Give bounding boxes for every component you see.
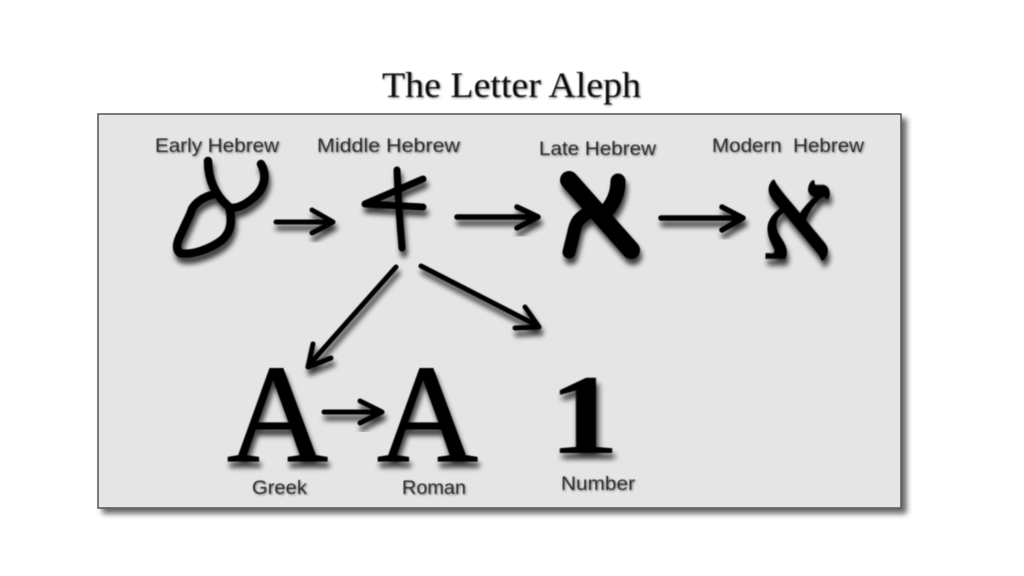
icon: late Hebrew aleph [569, 180, 631, 252]
arrow: middle Hebrew to number [421, 266, 539, 328]
label: Number: Number [561, 474, 636, 495]
arrow: early to middle [276, 210, 333, 233]
label: Late Hebrew: Late Hebrew [539, 139, 656, 160]
icon: early Hebrew ox-head aleph [177, 161, 264, 254]
letter: Roman A: A [377, 337, 478, 492]
letter: Greek A: A [227, 337, 328, 492]
title: The Letter Aleph [382, 65, 641, 105]
panel: letter chart background [98, 114, 901, 508]
icon: middle Hebrew aleph [365, 170, 423, 248]
label: Middle Hebrew: Middle Hebrew [317, 136, 460, 157]
arrow: middle to late [457, 207, 538, 228]
arrow: Greek to Roman [324, 401, 382, 423]
arrow: late to modern [661, 207, 743, 230]
icon: modern Hebrew aleph: א [761, 142, 833, 287]
label: Early Hebrew: Early Hebrew [155, 136, 279, 157]
label: Roman: Roman [402, 478, 466, 499]
label: Greek: Greek [252, 478, 308, 499]
numeral: 1: 1 [548, 351, 620, 478]
label: Modern Hebrew: Modern Hebrew [712, 136, 864, 157]
arrow: middle Hebrew to Greek [308, 267, 396, 367]
